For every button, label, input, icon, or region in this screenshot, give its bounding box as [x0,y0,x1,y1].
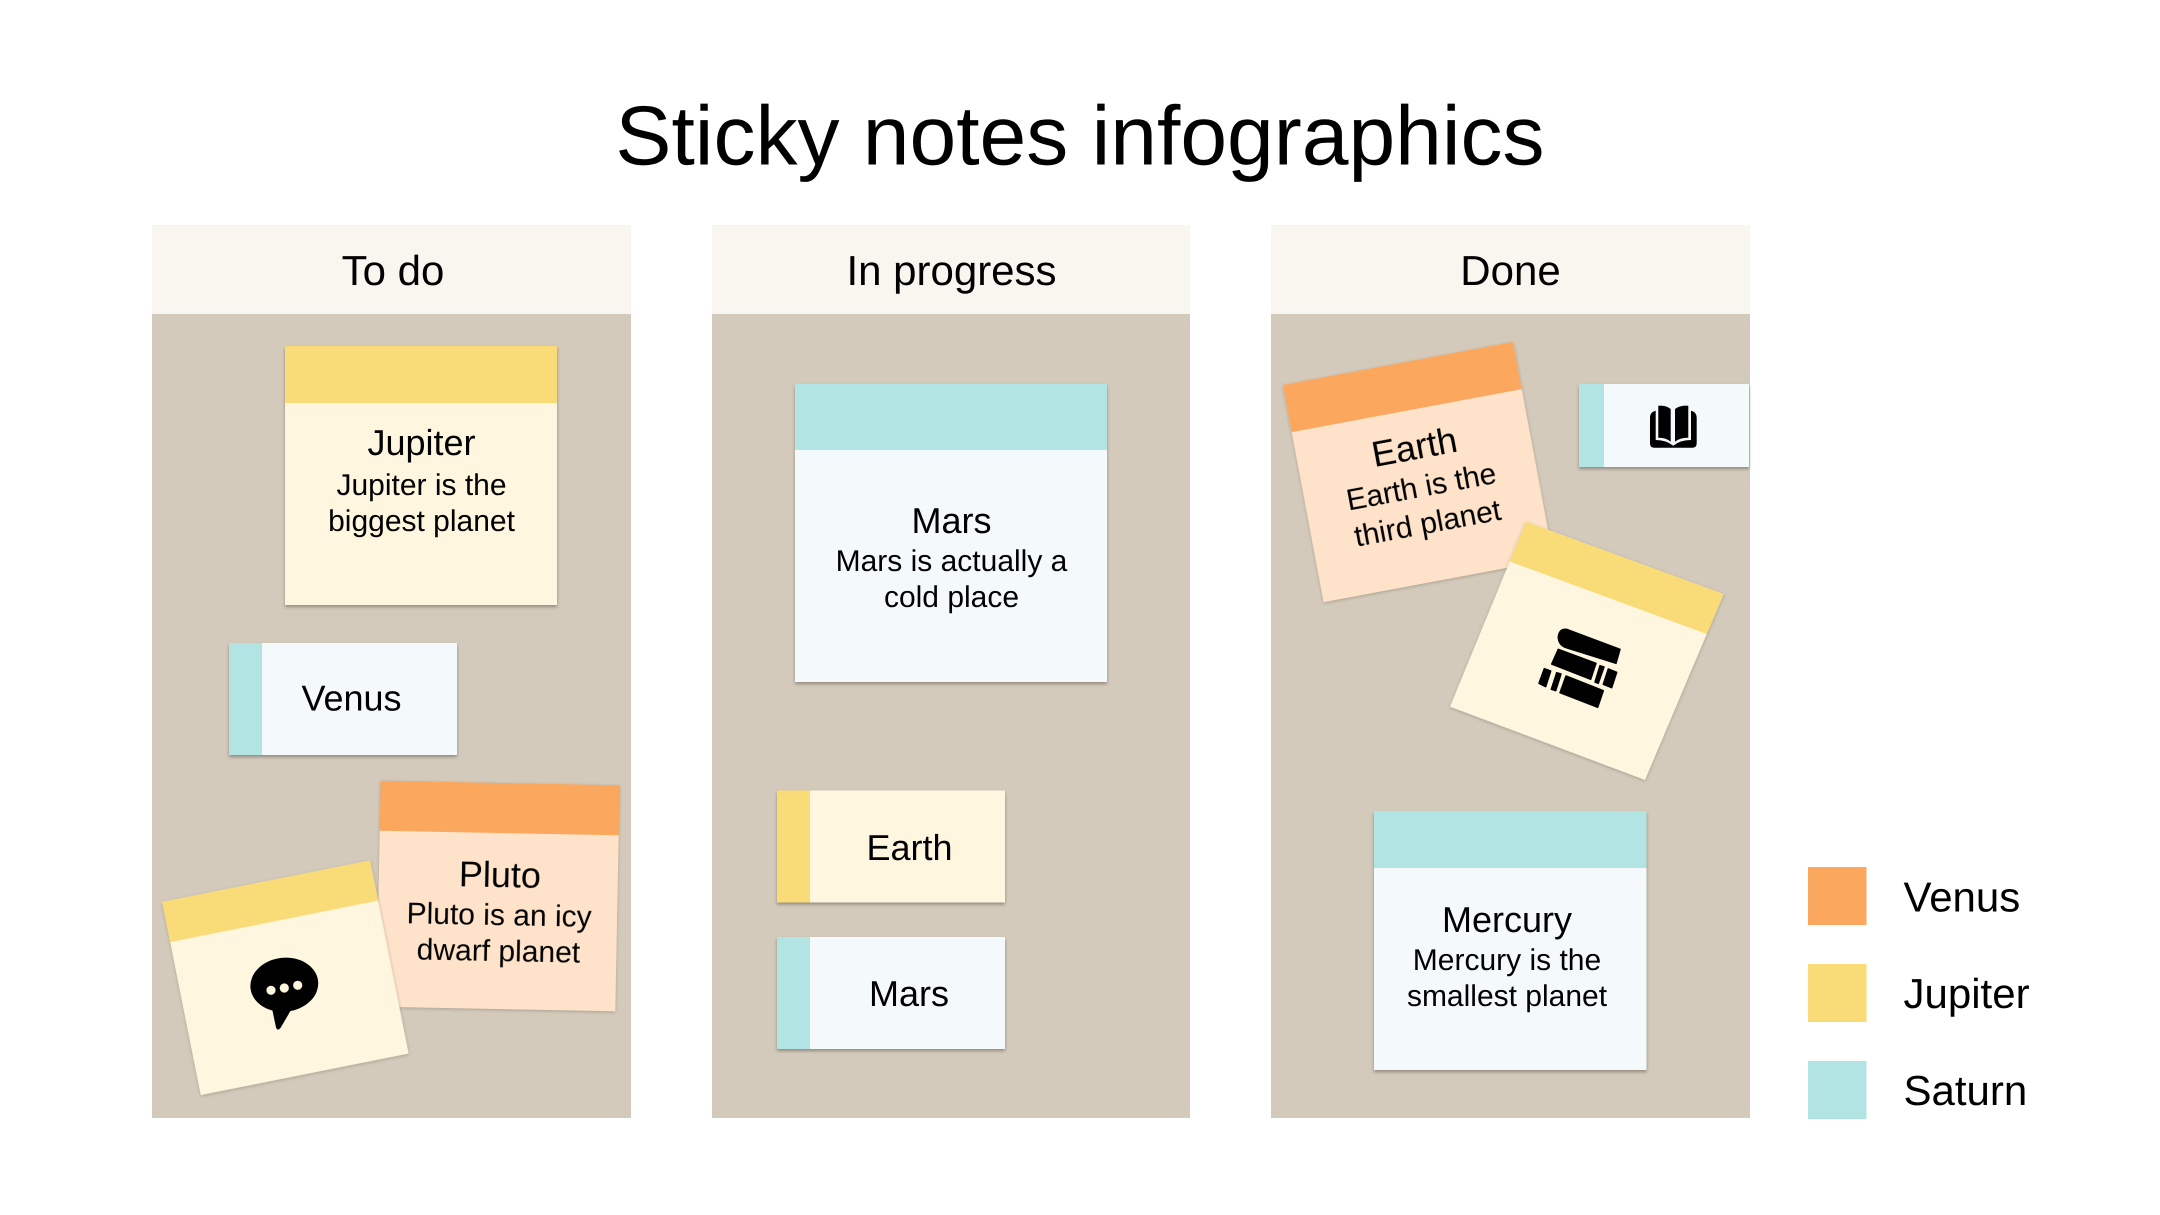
legend item: Jupiter [1808,964,2030,1022]
note: Earth rotated: Earth [1368,419,1460,475]
note: Venus [229,643,457,755]
legend item: Jupiter: Jupiter [1904,970,2030,1017]
panel header: In progress: In progress [846,247,1057,294]
note: Earth rotated: Earth is the [1344,457,1499,517]
panel header: Done [1271,225,1750,314]
note: Mercury: Mercury [1442,899,1572,940]
note: Jupiter: Jupiter is the [336,469,507,502]
note: Mars small: Mars [869,973,949,1014]
legend item: Saturn [1808,1061,2027,1119]
note: Mars large: Mars is actually a [836,545,1068,578]
note: Venus: Venus [301,678,402,718]
panel: To do [152,225,631,1118]
title: Sticky notes infographics [615,88,1545,182]
note: Pluto: Pluto is an icy [406,897,592,934]
note: books icon [1450,522,1724,780]
panel: Done [1271,225,1750,1118]
panel body: In progress [712,314,1190,1118]
note: Mars large [795,384,1107,682]
note: Earth small: Earth [866,827,953,868]
icon: open book [1650,406,1697,448]
note: Mercury: Mercury is the [1413,944,1601,977]
legend item: Venus: Venus [1904,874,2020,921]
note: Jupiter: Jupiter [367,422,476,463]
note: Mars large: Mars [912,500,992,541]
note paper: yellow [1450,522,1724,780]
note: Jupiter: biggest planet [328,505,516,538]
note paper: blue [1579,384,1749,467]
panel header: Done: Done [1460,247,1561,294]
panel header: In progress [712,225,1190,314]
note: Earth rotated [1283,342,1554,602]
panel body: Done [1271,314,1750,1118]
legend [1808,867,2030,1119]
icon: speech bubble [248,954,321,1030]
note: Earth small [777,790,1005,902]
legend item: Saturn: Saturn [1904,1067,2027,1114]
panel header: To do [152,225,631,314]
note: Pluto: Pluto [458,853,541,896]
icon: stack of books [1539,629,1620,707]
legend item: Venus [1808,867,2020,925]
note: Pluto [376,781,620,1011]
note: Mars large: cold place [884,581,1019,614]
note: Pluto: dwarf planet [416,933,581,970]
note: book icon [1579,384,1749,467]
note: Mercury [1374,811,1646,1070]
note: Earth rotated: third planet [1352,494,1504,554]
panel body: To do [152,314,631,1118]
note: Mercury: smallest planet [1407,980,1608,1013]
note paper: yellow [162,860,409,1095]
note: Mars small [777,937,1005,1049]
panel header: To do: To do [342,247,444,294]
note: Jupiter [285,346,557,605]
panel: In progress [712,225,1190,1118]
note: chat icon [162,860,409,1095]
